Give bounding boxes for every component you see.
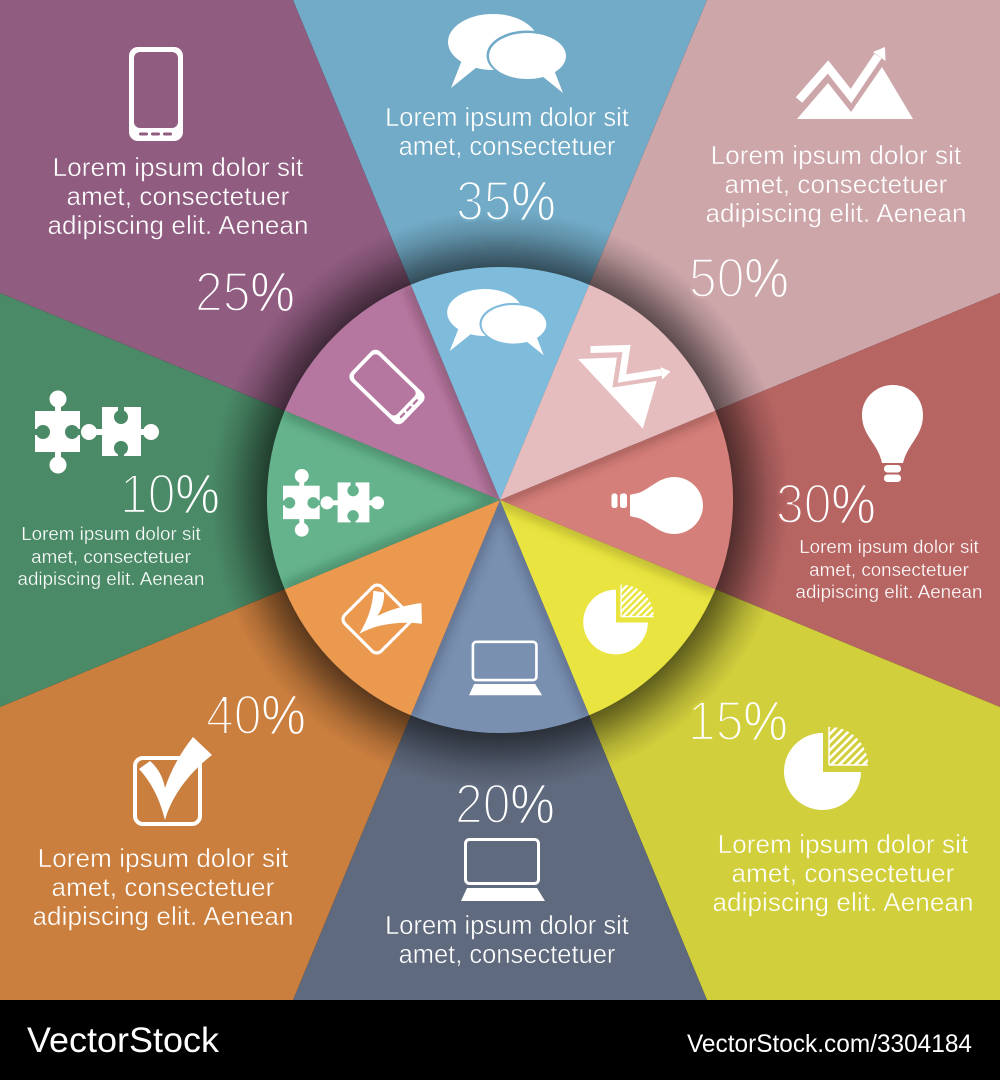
- icon: phone: [129, 47, 183, 141]
- text: red panel: amet, consectetuer: [809, 559, 969, 580]
- icon: chat bubbles: [448, 14, 568, 93]
- icon: puzzle: [33, 390, 159, 474]
- text: blue panel: Lorem ipsum dolor sit: [385, 104, 629, 132]
- panel: blue outer wedge: [293, 0, 707, 500]
- value: 25%: 25%: [195, 261, 295, 324]
- icon: check box: [135, 737, 212, 824]
- value: 20%: 20%: [455, 773, 555, 836]
- text: pink panel: [705, 140, 967, 228]
- panel: pink outer wedge: [500, 0, 1000, 500]
- text: orange panel: [32, 843, 294, 931]
- icon: mountain chart: [797, 47, 913, 119]
- footer logo: VectorStock: [27, 1021, 220, 1060]
- inner wedge: orange: [284, 500, 500, 716]
- text: green panel: Lorem ipsum dolor sit: [21, 523, 202, 544]
- inner pie chart: [260, 260, 740, 740]
- text: purple panel: [47, 152, 309, 240]
- panel: orange outer wedge: [0, 500, 500, 1000]
- text: pink panel: adipiscing elit. Aenean: [705, 198, 967, 228]
- text: pink panel: Lorem ipsum dolor sit: [711, 140, 962, 170]
- text: yellow panel: Lorem ipsum dolor sit: [718, 829, 969, 859]
- value: 15%: 15%: [688, 690, 788, 753]
- text: red panel: [796, 536, 982, 602]
- inner wedge: blue: [410, 267, 590, 500]
- icon: inner puzzle: [281, 469, 384, 537]
- icon: inner laptop: [469, 642, 542, 695]
- text: green panel: amet, consectetuer: [31, 546, 191, 567]
- text: blue panel: amet, consectetuer: [399, 133, 616, 161]
- panel: purple outer wedge: [0, 0, 500, 500]
- text: purple panel: Lorem ipsum dolor sit: [53, 152, 304, 182]
- text: orange panel: Lorem ipsum dolor sit: [38, 843, 289, 873]
- text: purple panel: amet, consectetuer: [67, 181, 290, 211]
- text: red panel: adipiscing elit. Aenean: [796, 581, 982, 602]
- panel: red outer wedge: [500, 293, 1000, 707]
- text: orange panel: adipiscing elit. Aenean: [32, 901, 294, 931]
- icon: inner mountain chart: [578, 319, 686, 429]
- icon: inner pie chart: [577, 579, 701, 654]
- footer url: VectorStock.com/3304184: [687, 1030, 972, 1058]
- text: red panel: Lorem ipsum dolor sit: [799, 536, 980, 557]
- inner wedge: yellow: [500, 500, 716, 716]
- inner wedge: green: [266, 410, 500, 590]
- text: purple panel: adipiscing elit. Aenean: [47, 210, 309, 240]
- icon: inner check box: [340, 571, 432, 662]
- icon: inner chat bubbles: [447, 289, 548, 355]
- value: 10%: 10%: [120, 463, 220, 526]
- inner wedge: purple: [284, 284, 500, 500]
- value: 50%: 50%: [689, 247, 789, 310]
- value: 35%: 35%: [456, 170, 556, 233]
- text: yellow panel: adipiscing elit. Aenean: [712, 887, 974, 917]
- icon: inner phone: [347, 347, 427, 427]
- icon: laptop: [461, 840, 545, 901]
- panel: yellow outer wedge: [500, 500, 1000, 1000]
- inner wedge: red: [500, 410, 734, 590]
- text: yellow panel: amet, consectetuer: [732, 858, 955, 888]
- circle drop shadow: [210, 210, 790, 790]
- panel: green outer wedge: [0, 293, 500, 707]
- value: 40%: 40%: [206, 684, 306, 747]
- text: slate panel: [385, 912, 629, 969]
- inner wedge: pink: [500, 285, 715, 500]
- text: green panel: adipiscing elit. Aenean: [18, 568, 204, 589]
- text: green panel: [18, 523, 204, 589]
- text: orange panel: amet, consectetuer: [52, 872, 275, 902]
- text: yellow panel: [712, 829, 974, 917]
- text: slate panel: Lorem ipsum dolor sit: [385, 912, 629, 940]
- icon: pie chart: [776, 720, 924, 810]
- icon: inner light bulb: [612, 477, 703, 534]
- value: 30%: 30%: [776, 473, 876, 536]
- footer bar: [0, 1000, 1000, 1080]
- text: blue panel: [385, 104, 629, 161]
- inner wedge: slate: [410, 500, 590, 733]
- text: slate panel: amet, consectetuer: [399, 941, 616, 969]
- icon: light bulb: [862, 385, 923, 482]
- text: pink panel: amet, consectetuer: [725, 169, 948, 199]
- panel: slate outer wedge: [293, 500, 707, 1000]
